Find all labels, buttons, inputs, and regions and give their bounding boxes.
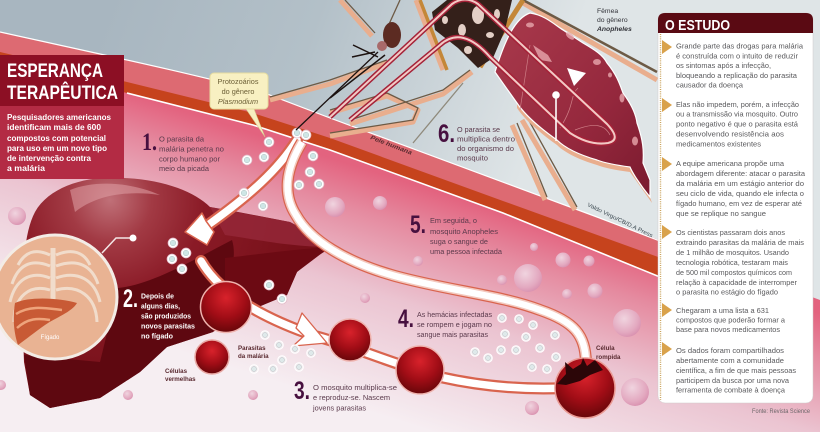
step 3: O mosquito multiplica-se [313,383,397,392]
paragraph 2: ponto negativo é que o parasita está [676,120,799,128]
paragraph 3: A equipe americana propõe uma [676,159,785,168]
paragraph 4: de 1 milhão de mosquitos. Usando [676,248,789,257]
step 2: alguns dias, [141,302,180,310]
callout: protozoários: do gênero [222,87,254,96]
label: fêmea do gênero Anopheles: Anopheles [596,26,632,33]
step 6: do organismo do [457,144,514,153]
parasites released from liver [250,331,315,373]
paragraph 4: o parasita no estágio do fígado [676,288,778,296]
liver [23,177,332,408]
paragraph 5: Chegaram a uma lista a 631 [676,306,769,315]
label: células vermelhas: vermelhas [165,376,196,383]
title box [0,55,124,179]
step 5: suga o sangue de [430,237,488,246]
paragraph 1: os sintomas após a infecção, [676,61,771,70]
step 4: se rompem e jogam no [417,320,492,329]
step 1 [142,129,224,173]
paragraph 4: extraindo parasitas da malária de mais [676,238,804,247]
paragraph 2: ou a transmissão via mosquito. Outro [676,110,798,118]
label: pele humana: Pele humana [369,134,413,157]
step 6 [438,120,515,162]
title: TERAPÊUTICA [7,82,118,104]
mosquito abdomen shadow [517,103,652,203]
label: photo credit: Valdo Virgo/CB/D.A Press [586,202,654,239]
mosquito veins [520,45,610,135]
label: células vermelhas: Células [165,368,188,375]
step 5 [410,211,503,256]
tube: liver through red cells with arrow [201,261,565,389]
step 2: 2. [123,285,138,313]
label: fêmea do gênero Anopheles: do gênero [597,17,628,24]
step 1: corpo humano por [159,154,220,164]
paragraph 6: científica, a fim de que mais pessoas [676,366,796,375]
paragraph 2: medicamentos existentes [676,140,761,148]
panel: o estudo [658,13,813,403]
parasites released from ruptured cell [471,314,560,373]
paragraph 1: bloqueando a replicação do parasita [676,71,798,80]
paragraph 1: Grande parte das drogas para malária [676,42,804,50]
step 5: Em seguida, o [430,216,477,225]
step 5: mosquito Anopheles [430,227,498,236]
step 4: 4. [398,305,414,333]
label: célula rompida: Célula [596,345,615,352]
step 4: As hemácias infectadas [417,310,492,319]
mosquito thorax [432,0,512,68]
intro text: de intervenção contra [7,154,92,163]
paragraph 3: da malária em um estágio anterior do [676,179,804,188]
step 3: 3. [294,377,310,405]
label: fígado: Fígado [41,335,60,341]
mosquito head [352,22,401,57]
panel header [658,13,813,33]
paragraph 1: é construída com o intuito de reduzir [676,51,798,60]
step 3: jovens parasitas [312,404,366,412]
step 5: 5. [410,211,426,239]
label: parasitas da malária: Parasitas [238,345,266,352]
callout: protozoários [210,73,268,137]
mosquito abdomen [495,13,650,197]
label: fêmea do gênero Anopheles: Fêmea [597,8,618,15]
red blood cells [195,282,444,394]
paragraph 5: compostos que poderão formar a [676,316,786,324]
step 1: malária penetra no [159,144,224,154]
paragraph 2: desenvolvendo resistência aos [676,130,784,138]
intro text: compostos com potencial [7,134,106,143]
paragraph 4: de 500 mil compostos químicos com [676,268,792,277]
intro text: para uso em um novo tipo [7,144,107,153]
paragraph 2: Elas não impedem, porém, a infecção [676,100,799,109]
label: célula rompida: rompida [596,354,621,361]
bubbles: blood cells in background [0,196,649,415]
paragraph 1: causador da doença [676,81,744,90]
paragraph 5: base para novos medicamentos [676,325,780,334]
step 4: sangue mais parasitas [417,330,488,339]
paragraph 4: Os cientistas passaram dois anos [676,228,785,237]
inset pointer line [102,234,136,253]
step 3 [294,377,397,412]
paragraph 6: Os dados foram compartilhados [676,346,784,355]
parasites group in skin [239,128,324,211]
step 6: mosquito [457,154,488,162]
mosquito [270,0,657,210]
callout: protozoários: Plasmodium [218,97,258,106]
mosquito proboscis [296,52,378,130]
panel heading: O ESTUDO [665,17,730,34]
mosquito legs shadow [270,0,657,210]
step 2: são produzidos [141,312,191,320]
step 2 [123,285,195,340]
intro text: identificam mais de 600 [7,123,102,132]
step 6: 6. [438,120,455,148]
parasites group in liver [167,238,287,304]
inset: chest with liver location [0,235,117,359]
arrow inside mosquito [567,68,586,86]
step 4 [398,305,492,339]
intro text: a malária [7,164,46,173]
step 5: uma pessoa infectada [430,247,503,256]
tube inside mosquito [330,0,615,144]
pointer inside mosquito [552,91,560,141]
paragraph 6: abertamente com a comunidade [676,356,784,365]
bullet markers [662,40,672,356]
paragraph 3: que se replique no sangue [676,209,766,218]
mosquito legs [270,0,657,207]
step 3: e reproduz-se. Nascem [313,393,390,402]
step 6: multiplica dentro [457,134,515,144]
mosquito highlights [526,22,638,146]
step 2: Depois de [141,292,174,300]
paragraph 3: abordagem diferente: atacar o parasita [676,169,806,178]
paragraph 6: participem da busca por uma nova [676,376,790,385]
paragraph 3: seu ciclo de vida, quando ele infecta o [676,189,804,198]
step 2: novos parasitas [141,322,195,330]
step 1: meio da picada [159,164,210,173]
paragraph 4: relação à capacidade de interromper [676,278,797,287]
source: Fonte: Revista Science [752,408,811,415]
title: ESPERANÇA [7,61,103,82]
intro text: Pesquisadores americanos [7,113,112,122]
step 6: O parasita se [457,125,500,134]
paragraph 3: fígado humano, em vez de esperar até [676,199,802,208]
step 1: 1. [142,129,157,156]
ruptured cell [555,358,615,418]
tube: mosquito bite to ruptured cell [288,142,586,362]
tube: path from skin to liver [185,140,297,245]
callout: protozoários: Protozoários [218,77,259,86]
label: parasitas da malária: da malária [238,353,269,360]
step 2: no fígado [141,332,173,340]
paragraph 6: ferramenta de combate à doença [676,386,786,394]
step 1: O parasita da [159,134,205,144]
paragraph 4: tecnologia robótica, testaram mais [676,258,788,267]
